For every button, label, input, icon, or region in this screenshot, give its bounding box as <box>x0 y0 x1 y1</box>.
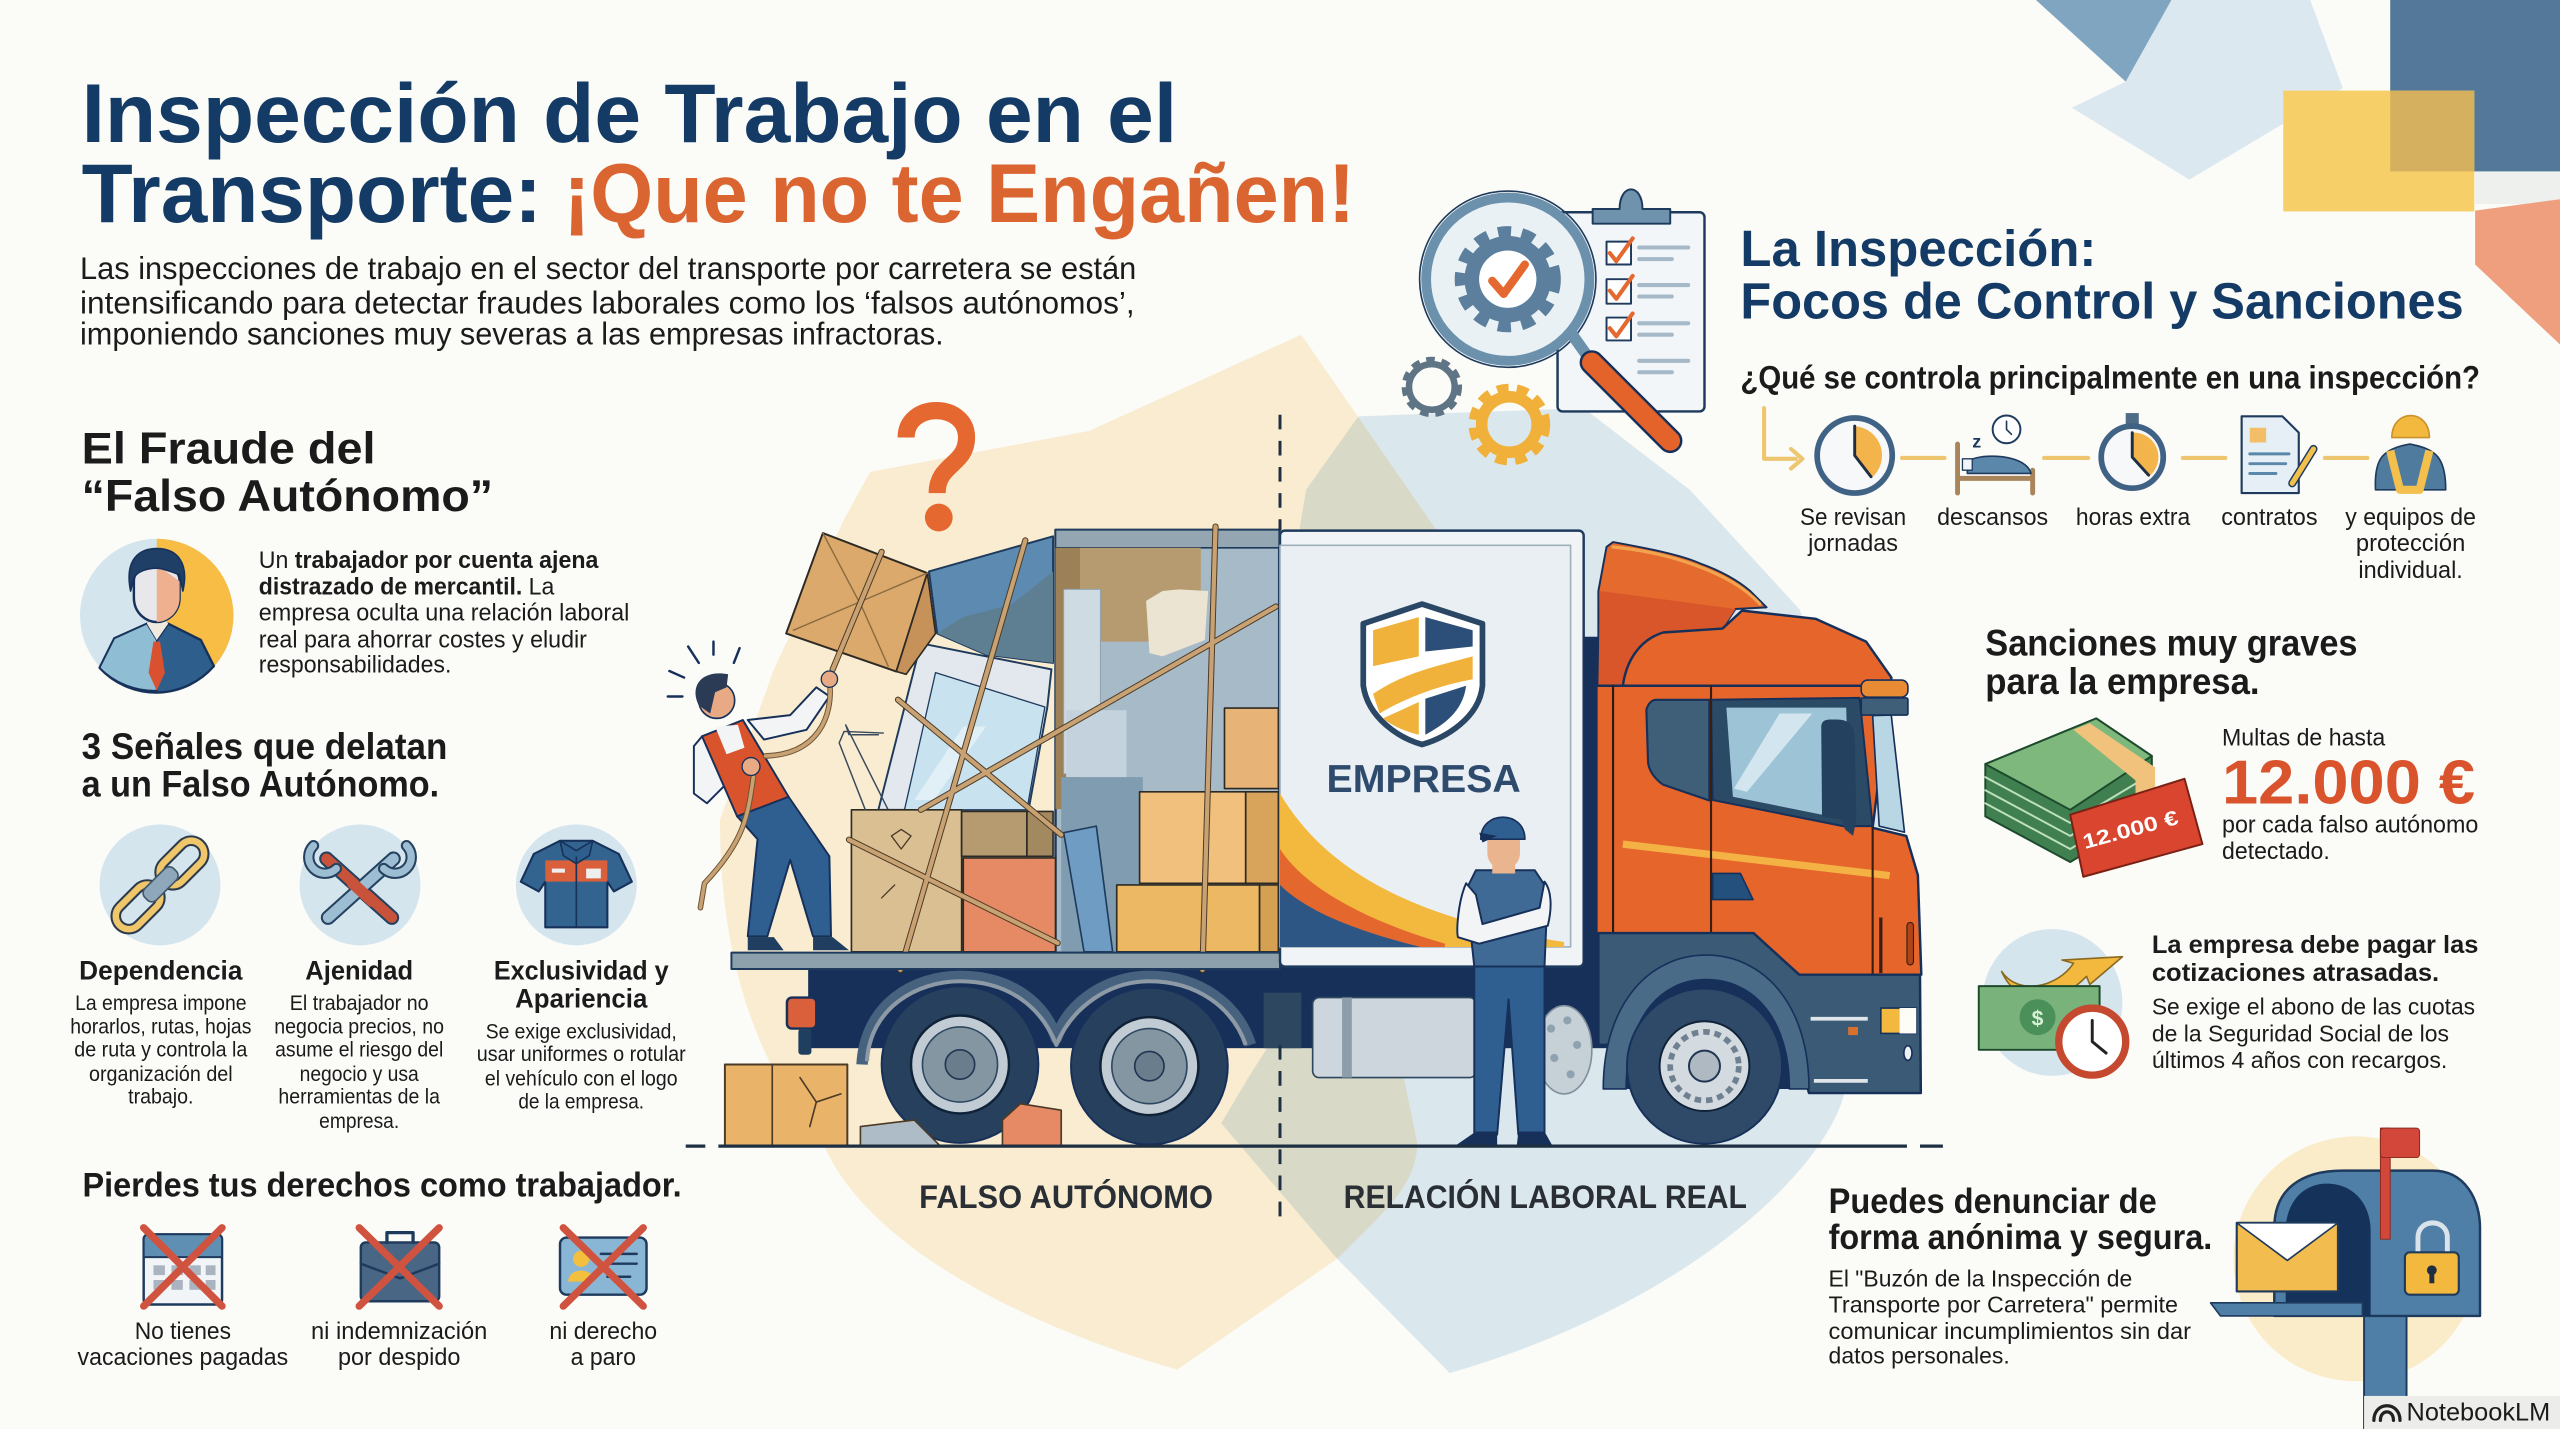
connectors <box>1902 457 2367 459</box>
heading: fraude <box>82 423 493 521</box>
caption: paro: ni derecho <box>549 1318 657 1345</box>
text: multas: 12.000 € <box>2222 748 2475 817</box>
heading: sanciones <box>1985 623 2358 702</box>
heading: fraude: “Falso Autónomo” <box>82 470 493 521</box>
icon: bed with z <box>1958 416 2033 493</box>
title <box>82 67 1355 240</box>
caption: paro <box>549 1318 657 1371</box>
intro text: imponiendo sanciones muy severas a las empresas infractoras. <box>80 316 944 351</box>
panel: sanciones <box>1979 623 2478 1076</box>
text: buzón: comunicar incumplimientos sin dar <box>1829 1318 2191 1344</box>
truck cab <box>1584 542 1921 1093</box>
icon: false-self-employed person <box>80 539 233 692</box>
captions: checks: individual. <box>2358 558 2463 584</box>
background blob: yellow <box>720 335 1437 1370</box>
text: multas: detectado. <box>2222 839 2330 865</box>
intro text <box>80 251 1136 352</box>
caption: vacaciones: No tienes <box>135 1318 231 1345</box>
icon: chain <box>100 824 220 945</box>
icon: late payment <box>1979 929 2126 1076</box>
column: ajenidad: asume el riesgo del <box>275 1038 443 1061</box>
text: definition: real para ahorrar costes y eludir <box>259 627 587 653</box>
column: ajenidad: El trabajador no <box>290 992 429 1015</box>
arrow: flow start <box>1764 408 1802 469</box>
truck box: relación laboral real <box>1280 531 1584 967</box>
text: cotizaciones: cotizaciones atrasadas. <box>2152 959 2439 987</box>
text: definition: empresa oculta una relación laboral <box>259 600 629 626</box>
text: definition: responsabilidades. <box>259 653 451 679</box>
text: multas: por cada falso autónomo <box>2222 813 2478 839</box>
text: cotizaciones <box>2152 931 2478 1073</box>
icon: money stack and ticket <box>1985 718 2202 877</box>
heading: sanciones: para la empresa. <box>1985 661 2260 702</box>
wheel: rear right <box>1071 988 1228 1144</box>
column: exclusividad y apariencia: usar uniformes o rotular <box>477 1043 686 1066</box>
column: ajenidad: Ajenidad <box>305 956 413 986</box>
decorative corner shapes <box>2036 0 2560 345</box>
text: definition <box>259 548 629 679</box>
captions: checks: descansos <box>1937 505 2048 531</box>
column: exclusividad y apariencia: Se exige exclusividad, <box>486 1020 677 1043</box>
intro text: Las inspecciones de trabajo en el sector del transporte por carretera se están <box>80 251 1136 286</box>
panel: 3 señales <box>70 726 686 1133</box>
broken box and debris on the ground <box>725 1064 1061 1146</box>
text: cotizaciones: Se exige el abono de las cuotas <box>2152 994 2475 1020</box>
column: ajenidad: negocia precios, no <box>274 1015 444 1038</box>
watermark: notebooklm: NotebookLM <box>2407 1398 2550 1426</box>
background blob: blue <box>1221 408 1894 1373</box>
captions: checks: contratos <box>2221 505 2318 531</box>
column: dependencia: La empresa impone <box>75 992 247 1015</box>
panel: pierdes tus derechos <box>78 1167 682 1371</box>
wheel: rear left <box>882 986 1038 1143</box>
truck platform <box>731 953 1280 969</box>
captions: checks <box>1800 505 2476 584</box>
column: ajenidad <box>274 956 444 1133</box>
heading: denunciar: forma anónima y segura. <box>1829 1218 2212 1257</box>
icon: crossed wrenches <box>300 824 420 945</box>
text: definition: distrazado de mercantil. La <box>259 574 555 600</box>
label: falso autónomo: FALSO AUTÓNOMO <box>919 1178 1213 1215</box>
column: exclusividad y apariencia: el vehículo con el logo <box>485 1068 678 1091</box>
text: cotizaciones: de la Seguridad Social de los <box>2152 1020 2449 1046</box>
heading: la inspección <box>1740 220 2464 329</box>
heading: denunciar: Puedes denunciar de <box>1829 1182 2157 1221</box>
text: buzón: datos personales. <box>1829 1342 2010 1368</box>
column: dependencia: horarlos, rutas, hojas <box>70 1015 251 1038</box>
heading: señales <box>82 726 447 805</box>
caption: indemnización: por despido <box>338 1344 460 1371</box>
column: dependencia: organización del <box>89 1063 233 1086</box>
heading: la inspección: La Inspección: <box>1740 220 2096 277</box>
column: ajenidad: negocio y usa <box>300 1063 419 1086</box>
icon: stopwatch <box>2101 413 2163 488</box>
icon: uniform shirt <box>516 824 637 945</box>
captions: checks: horas extra <box>2076 505 2191 531</box>
heading: denunciar <box>1829 1182 2212 1257</box>
captions: checks: protección <box>2356 531 2465 557</box>
caption: paro: a paro <box>571 1344 636 1371</box>
flow: inspection checks <box>1764 408 2476 584</box>
heading: fraude: El Fraude del <box>82 423 376 474</box>
wheel: front <box>1627 989 1782 1144</box>
captions: checks: jornadas <box>1807 531 1898 557</box>
subheading: qué se controla: ¿Qué se controla principalmente en una inspección? <box>1740 359 2480 396</box>
ground line <box>686 1145 1943 1147</box>
heading: derechos: Pierdes tus derechos como trabajador. <box>82 1167 682 1205</box>
heading: señales: a un Falso Autónomo. <box>82 764 439 805</box>
panel: denuncia anónima <box>1829 1128 2480 1429</box>
truck chassis <box>787 963 1649 1094</box>
central illustration: truck <box>668 411 1943 1228</box>
text: buzón: Transporte por Carretera" permite <box>1829 1292 2178 1318</box>
caption: vacaciones: vacaciones pagadas <box>78 1344 288 1371</box>
icon: contract <box>2242 416 2313 493</box>
column: exclusividad y apariencia <box>477 956 686 1114</box>
icon: clock <box>1817 418 1892 493</box>
text: cotizaciones: últimos 4 años con recargos. <box>2152 1047 2447 1073</box>
figure: employee with crossed arms <box>1455 817 1553 1146</box>
icon: crossed-out id card <box>560 1228 647 1306</box>
label: empresa: EMPRESA <box>1327 758 1521 801</box>
panel: el fraude del falso autónomo <box>80 423 629 692</box>
heading: sanciones: Sanciones muy graves <box>1985 623 2358 664</box>
icon: magnifier, clipboard and gears <box>1406 189 1704 460</box>
title: ¡Que no te Engañen! <box>563 147 1355 240</box>
label: relación laboral real: RELACIÓN LABORAL REAL <box>1344 1178 1747 1215</box>
column: exclusividad y apariencia: Exclusividad y <box>494 956 669 986</box>
icon: bed with z: z <box>1972 431 1981 451</box>
cargo: falso autónomo load <box>786 527 1279 970</box>
figure: worker pulling rope <box>668 642 883 950</box>
icon: crossed-out briefcase <box>359 1228 439 1306</box>
captions: checks: y equipos de <box>2345 505 2476 531</box>
column: exclusividad y apariencia: de la empresa. <box>518 1091 644 1114</box>
heading: la inspección: Focos de Control y Sanciones <box>1740 272 2464 329</box>
icon: question mark <box>906 411 967 531</box>
icon: money stack and ticket: 12.000 € <box>2080 807 2181 854</box>
text: buzón <box>1829 1266 2191 1368</box>
text: cotizaciones: La empresa debe pagar las <box>2152 931 2478 959</box>
icon: late payment: $ <box>2032 1007 2044 1030</box>
icon: mailbox <box>2211 1128 2480 1429</box>
caption: vacaciones <box>78 1318 288 1371</box>
column: exclusividad y apariencia: Apariencia <box>515 983 648 1013</box>
column: dependencia: trabajo. <box>128 1086 193 1109</box>
center divider <box>1279 415 1281 1228</box>
heading: señales: 3 Señales que delatan <box>82 726 447 767</box>
icon: crossed-out calendar <box>144 1228 222 1306</box>
icon: worker with helmet <box>2375 416 2446 490</box>
text: multas: Multas de hasta <box>2222 725 2386 751</box>
text: buzón: El "Buzón de la Inspección de <box>1829 1266 2132 1292</box>
column: dependencia: Dependencia <box>79 956 243 986</box>
logo: shield <box>1363 604 1482 744</box>
column: ajenidad: empresa. <box>319 1110 399 1133</box>
caption: indemnización <box>311 1318 487 1371</box>
column: dependencia <box>70 956 251 1109</box>
title: Transporte: <box>82 147 542 240</box>
intro text: intensificando para detectar fraudes laborales como los ‘falsos autónomos’, <box>80 285 1135 320</box>
text: definition: Un trabajador por cuenta ajena <box>259 548 599 574</box>
text: multas <box>2222 725 2478 865</box>
watermark: notebooklm <box>2364 1396 2560 1429</box>
title: Inspección de Trabajo en el <box>82 67 1177 160</box>
captions: checks: Se revisan <box>1800 505 1906 531</box>
column: ajenidad: herramientas de la <box>278 1086 440 1109</box>
caption: indemnización: ni indemnización <box>311 1318 487 1345</box>
column: dependencia: de ruta y controla la <box>74 1038 248 1061</box>
